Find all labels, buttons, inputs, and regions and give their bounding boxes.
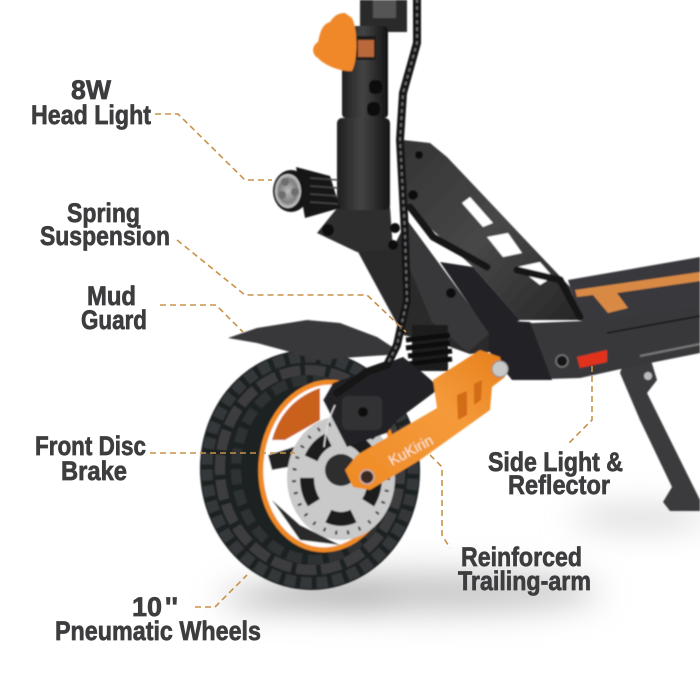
side light reflector bbox=[556, 350, 607, 368]
label: reinforced trailing arm: Reinforced bbox=[461, 542, 582, 572]
label: side light and reflector: Reflector bbox=[508, 470, 610, 500]
label: head light: Head Light bbox=[31, 100, 151, 130]
triangular support plate bbox=[403, 140, 580, 320]
brake disc bbox=[287, 416, 395, 540]
label: spring suspension: Spring bbox=[67, 198, 140, 228]
arm logo: KuKirin bbox=[386, 432, 436, 470]
label: front disc brake: Brake bbox=[61, 456, 127, 486]
label: front disc brake: Front Disc bbox=[35, 431, 146, 461]
inner guard and caliper bbox=[323, 357, 440, 447]
label: head light: 8W bbox=[71, 75, 112, 105]
kickstand bbox=[620, 353, 700, 511]
headlight bbox=[273, 167, 340, 218]
label: mud guard: Mud bbox=[87, 281, 136, 311]
fork strut and lower arm bbox=[357, 220, 552, 380]
front tire bbox=[192, 343, 428, 597]
label: side light and reflector: Side Light & bbox=[488, 447, 623, 477]
leader: head light bbox=[155, 114, 272, 180]
scooter illustration bbox=[192, 0, 700, 597]
deck bbox=[568, 257, 700, 333]
label: mud guard: Guard bbox=[81, 305, 147, 335]
label: head light bbox=[31, 75, 151, 130]
label: pneumatic wheels bbox=[55, 592, 261, 646]
orange rim bbox=[253, 376, 401, 556]
label: spring suspension bbox=[40, 198, 170, 251]
label: spring suspension: Suspension bbox=[40, 221, 170, 251]
bracket bbox=[317, 207, 400, 252]
leader: spring suspension bbox=[177, 240, 406, 332]
label: pneumatic wheels: 10'' bbox=[132, 592, 178, 622]
leader: front disc brake bbox=[150, 452, 295, 454]
label: reinforced trailing arm: Trailing-arm bbox=[458, 566, 591, 596]
label: reinforced trailing arm bbox=[458, 542, 591, 596]
leader: mud guard bbox=[160, 305, 243, 332]
leader: pneumatic wheels bbox=[195, 575, 247, 607]
brake cable and main cable bbox=[337, 0, 580, 393]
orange trailing arm bbox=[345, 350, 508, 490]
mudguard bbox=[228, 320, 397, 360]
steering stem bbox=[337, 0, 407, 210]
suspension spring bbox=[406, 325, 452, 371]
leader: trailing arm bbox=[430, 455, 450, 548]
label: mud guard bbox=[81, 281, 147, 335]
folding clamp knob bbox=[313, 13, 376, 71]
label: pneumatic wheels: Pneumatic Wheels bbox=[55, 616, 261, 646]
leader: side light bbox=[567, 366, 592, 445]
label: front disc brake bbox=[35, 431, 146, 486]
floor shadow bbox=[220, 508, 700, 612]
label: side light and reflector bbox=[488, 447, 623, 500]
deck body bbox=[490, 307, 700, 380]
